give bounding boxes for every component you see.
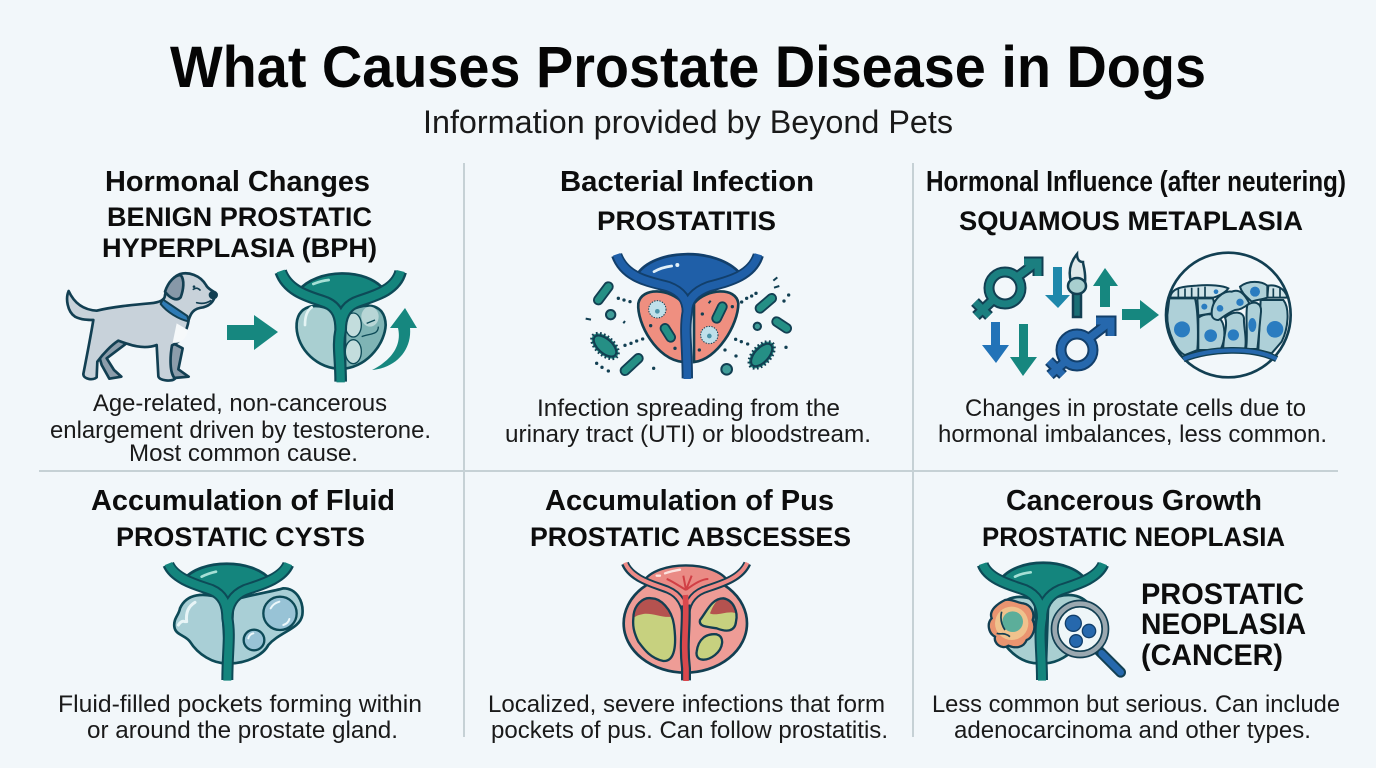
label: prostatic neoplasia (cancer): (CANCER) — [1141, 639, 1283, 672]
icon: blue hormone symbol — [1049, 321, 1111, 375]
description: enlargement driven by testosterone. — [50, 417, 431, 444]
description: Fluid-filled pockets forming within — [58, 691, 422, 718]
panel: bacterial infection / prostatitis — [505, 166, 871, 448]
label: prostatic neoplasia (cancer) — [1141, 578, 1306, 672]
description — [938, 395, 1327, 448]
panel: hormonal changes / BPH — [50, 166, 431, 467]
description: adenocarcinoma and other types. — [954, 717, 1311, 744]
description: urinary tract (UTI) or bloodstream. — [505, 421, 871, 448]
subheading: benign prostatic hyperplasia — [102, 202, 377, 263]
subheading: prostatic neoplasia: PROSTATIC NEOPLASIA — [982, 522, 1285, 552]
heading: accumulation of fluid: Accumulation of Fluid — [91, 485, 395, 517]
description — [505, 395, 871, 448]
arrows: hormone levels — [982, 267, 1118, 376]
subtitle: Information provided by Beyond Pets — [423, 104, 953, 140]
description — [50, 390, 431, 467]
description: Localized, severe infections that form — [488, 691, 885, 718]
heading: accumulation of pus: Accumulation of Pus — [545, 485, 834, 517]
icon: prostate with tumor and magnifier — [983, 563, 1121, 681]
subheading: benign prostatic hyperplasia: HYPERPLASIA (BPH) — [102, 233, 377, 263]
description: pockets of pus. Can follow prostatitis. — [491, 717, 888, 744]
description — [488, 691, 888, 744]
icon: infected prostate with bacteria — [586, 254, 790, 379]
label: prostatic neoplasia (cancer): NEOPLASIA — [1141, 608, 1306, 641]
description: Less common but serious. Can include — [932, 691, 1340, 718]
heading: hormonal changes: Hormonal Changes — [105, 166, 370, 198]
subheading: squamous metaplasia: SQUAMOUS METAPLASIA — [959, 206, 1303, 236]
description: Changes in prostate cells due to — [965, 395, 1306, 422]
heading: bacterial infection: Bacterial Infection — [560, 166, 814, 198]
arrow: dog to prostate — [227, 315, 278, 350]
icon: magnified cells — [1166, 253, 1291, 377]
icon: prostate with cysts — [168, 564, 303, 681]
subheading: benign prostatic hyperplasia: BENIGN PROSTATIC — [107, 202, 372, 232]
subheading: prostatitis: PROSTATITIS — [597, 206, 776, 236]
panel: fluid / prostatic cysts — [58, 485, 422, 744]
description: or around the prostate gland. — [87, 717, 398, 744]
description — [58, 691, 422, 744]
panel: pus / prostatic abscesses — [488, 485, 888, 744]
arrow: growth — [372, 308, 417, 370]
subheading: prostatic abscesses: PROSTATIC ABSCESSES — [530, 522, 851, 552]
description: Age-related, non-cancerous — [93, 390, 387, 417]
description: Most common cause. — [129, 440, 358, 467]
panel: cancerous growth / prostatic neoplasia — [932, 485, 1340, 744]
icon: dog — [67, 273, 217, 381]
description: hormonal imbalances, less common. — [938, 421, 1327, 448]
description — [932, 691, 1340, 744]
icon: brush-shaped gland marker — [1068, 254, 1086, 317]
description: Infection spreading from the — [537, 395, 840, 422]
label: prostatic neoplasia (cancer): PROSTATIC — [1141, 578, 1304, 611]
icon: enlarged prostate — [281, 271, 401, 382]
panel: hormonal influence / squamous metaplasia — [926, 166, 1346, 448]
subheading: prostatic cysts: PROSTATIC CYSTS — [116, 522, 365, 552]
title: What Causes Prostate Disease in Dogs — [170, 35, 1206, 100]
icon: teal hormone symbol — [975, 262, 1038, 316]
arrow: to cells — [1122, 300, 1159, 329]
heading: cancerous growth: Cancerous Growth — [1006, 485, 1262, 517]
icon: prostate with abscesses — [624, 563, 747, 681]
